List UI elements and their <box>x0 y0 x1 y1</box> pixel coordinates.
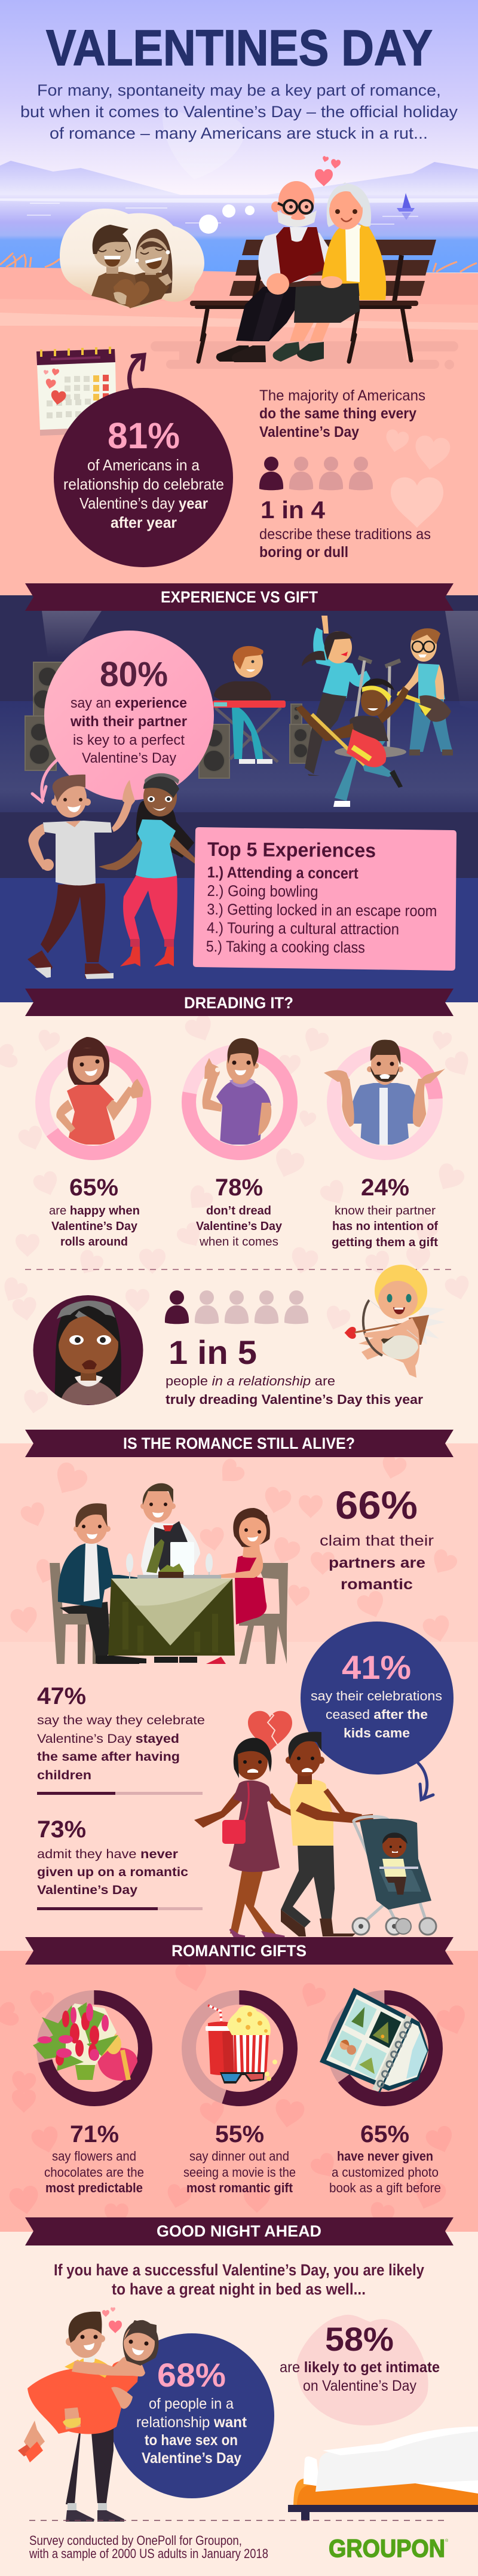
section background: romantic gifts <box>0 1951 478 2232</box>
stat: 71%: 71% <box>70 2121 119 2147</box>
illustration: dinner table <box>50 1483 288 1664</box>
panel: 80% stat circle: is key to a perfect <box>73 732 185 748</box>
panel: 41% stat circle: kids came <box>344 1726 410 1740</box>
illustration: worried woman <box>33 1295 143 1405</box>
section background: dreading it <box>0 1002 478 1443</box>
stat: 55%: most romantic gift <box>186 2180 293 2195</box>
stat: 24%: 24% <box>361 1174 409 1201</box>
section background: romance <box>0 1443 478 1953</box>
stat: 78%: don’t dread <box>206 1204 271 1217</box>
stat: 55%: 55% <box>215 2121 264 2147</box>
banner: is the romance still alive <box>25 1430 454 1457</box>
icon: hearts above couple <box>315 155 341 186</box>
text block: same thing every Valentine's Day: Valentine’s Day <box>259 424 359 440</box>
stat: 66% partners are romantic: 66% <box>335 1483 418 1527</box>
stat: 58%: on Valentine’s Day <box>303 2378 416 2394</box>
stat: 73% never given up: given up on a romantic <box>37 1865 188 1879</box>
source note: Survey conducted by OnePoll for Groupon, <box>29 2533 242 2548</box>
thought bubble with couple <box>60 204 255 308</box>
stat: 73% never given up: 73% <box>37 1816 86 1843</box>
stat: 1 in 4: boring or dull <box>259 544 348 561</box>
arrow: 80% circle to couple <box>32 760 57 801</box>
stat: 47% stayed the same <box>37 1683 205 1795</box>
panel: top 5 experiences: 1.) Attending a concert <box>207 863 358 882</box>
donut: 55% dinner and movie <box>189 1997 290 2099</box>
panel: top 5 experiences: 3.) Getting locked in an escape room <box>207 900 437 920</box>
illustration: bed <box>288 2427 478 2520</box>
stat: 78%: when it comes <box>199 1235 278 1249</box>
stat: 1 in 4: 1 in 4 <box>261 496 325 524</box>
donut: 78% don't dread <box>189 1038 290 1153</box>
stat: 65% <box>49 1174 140 1249</box>
stat: 58%: are likely to get intimate <box>280 2359 440 2376</box>
stat: 73% never given up: admit they have never <box>37 1847 178 1861</box>
icon: faint hearts <box>383 429 451 528</box>
banner: romantic gifts <box>25 1937 454 1965</box>
stat: 78%: Valentine’s Day <box>196 1220 283 1233</box>
intro text <box>20 81 458 142</box>
intro text: For many, spontaneity may be a key part of romance, <box>37 81 441 99</box>
panel: 68% stat circle: Valentine’s Day <box>142 2450 241 2467</box>
stat: 78% <box>196 1174 283 1249</box>
stat: 66% partners are romantic <box>320 1483 434 1593</box>
illustration: flowers and chocolates <box>33 2002 137 2081</box>
illustration: photo album <box>320 1988 428 2092</box>
panel: 68% stat circle: to have sex on <box>145 2432 238 2449</box>
panel: top 5 experiences: 4.) Touring a cultural attraction <box>207 919 399 938</box>
text block: same thing every Valentine's Day <box>259 387 425 440</box>
stat: 65% photo book <box>329 2121 441 2195</box>
stat: 47% stayed the same: Valentine’s Day stayed <box>37 1732 179 1746</box>
panel: 80% stat circle: with their partner <box>70 714 187 730</box>
icon: 1 in 4 people <box>259 457 373 490</box>
icon: beach plants <box>0 253 477 272</box>
panel: 80% stat circle: Valentine’s Day <box>82 750 176 766</box>
panel: 41% stat circle: say their celebrations <box>311 1688 442 1703</box>
stat: 65% photo book: have never given <box>337 2149 433 2164</box>
arrow: 41% circle to stroller <box>418 1763 433 1800</box>
panel: 68% stat circle: of people in a <box>149 2396 234 2412</box>
text block: same thing every Valentine's Day: do the same thing every <box>259 405 416 422</box>
stat: 58% <box>280 2320 440 2394</box>
stat: 73% never given up: Valentine’s Day <box>37 1883 137 1897</box>
panel: 80% stat circle: say an experience <box>71 695 187 711</box>
stat: 24%: getting them a gift <box>332 1236 438 1249</box>
icon: 1 in 5 people <box>165 1290 308 1324</box>
stat: 71%: most predictable <box>45 2180 143 2195</box>
panel: 81% stat circle <box>54 388 233 567</box>
donut: 71% flowers and chocolates <box>44 1997 145 2099</box>
panel: 41% stat circle: 41% <box>342 1648 411 1686</box>
panel: 81% stat circle: after year <box>111 513 177 531</box>
panel: 41% stat circle <box>301 1622 454 1775</box>
stat: 55% <box>183 2121 296 2195</box>
panel: 68% stat circle: 68% <box>157 2356 226 2394</box>
stat: 55%: seeing a movie is the <box>183 2165 296 2180</box>
shadow under bench <box>151 341 458 369</box>
panel: 41% stat circle: ceased after the <box>326 1707 428 1722</box>
source note <box>29 2533 268 2561</box>
panel: top 5 experiences: 2.) Going bowling <box>207 882 318 900</box>
banner: experience vs gift <box>25 583 454 611</box>
panel: top 5 experiences: 5.) Taking a cooking class <box>206 937 365 956</box>
stat: 78%: 78% <box>215 1174 263 1201</box>
illustration: family with stroller <box>194 1731 436 1938</box>
icon: sailboat <box>397 193 415 220</box>
stat: 65%: 65% <box>69 1174 118 1201</box>
stat: 66% partners are romantic: partners are <box>329 1555 425 1571</box>
stat: 65%: Valentine’s Day <box>51 1220 138 1233</box>
title: VALENTINES DAY <box>46 20 433 76</box>
panel: 81% stat circle: of Americans in a <box>87 456 200 474</box>
stat: 24%: know their partner <box>335 1204 436 1217</box>
stat: 66% partners are romantic: romantic <box>341 1576 413 1593</box>
banner: dreading it: DREADING IT? <box>184 994 293 1012</box>
stat: 65% photo book: book as a gift before <box>329 2180 441 2195</box>
intro text: of romance – many Americans are stuck in a rut... <box>50 124 428 142</box>
panel: 68% stat circle: relationship want <box>136 2414 247 2431</box>
good night intro text: If you have a successful Valentine’s Day, you are likely <box>54 2261 424 2279</box>
stat: 71% <box>44 2121 144 2195</box>
arrow: 81% circle to calendar/bench <box>130 355 144 390</box>
stat: 58%: 58% <box>325 2320 394 2358</box>
stat: 24%: has no intention of <box>332 1220 438 1233</box>
stat: 55%: say dinner out and <box>189 2149 289 2164</box>
banner: is the romance still alive: IS THE ROMANCE STILL ALIVE? <box>123 1434 355 1452</box>
donut: 65% happy <box>42 1037 144 1153</box>
stat: 1 in 5: people in a relationship are <box>166 1373 335 1388</box>
stat: 1 in 4 <box>259 496 431 561</box>
stat: 66% partners are romantic: claim that their <box>320 1532 434 1549</box>
illustration: popcorn and soda <box>206 2005 277 2084</box>
stat: 65% photo book: 65% <box>360 2121 409 2147</box>
stat: 65% photo book: a customized photo <box>332 2165 439 2180</box>
panel: 81% stat circle: 81% <box>108 415 180 456</box>
stat: 65%: are happy when <box>49 1204 140 1217</box>
illustration: bench <box>190 240 436 362</box>
good night intro text: to have a great night in bed as well... <box>112 2280 366 2298</box>
stat: 47% stayed the same: the same after having <box>37 1750 180 1764</box>
bench legs and shoes over shadow <box>198 335 411 362</box>
donut: 24% no gift <box>324 1040 445 1153</box>
stat: 24% <box>332 1174 438 1249</box>
stat: 1 in 5: 1 in 5 <box>168 1333 257 1371</box>
stat: 47% stayed the same: children <box>37 1769 91 1782</box>
icon: calendar <box>36 347 117 436</box>
donut: 65% photo book <box>334 1997 436 2099</box>
banner: romantic gifts: ROMANTIC GIFTS <box>171 1942 307 1960</box>
illustration: man carrying woman <box>18 2307 158 2522</box>
banner: dreading it <box>25 989 454 1016</box>
intro text: but when it comes to Valentine’s Day – the official holiday <box>20 103 458 121</box>
illustration: dancing couple <box>27 773 195 979</box>
panel: top 5 experiences <box>193 827 456 971</box>
good night intro text <box>54 2261 424 2298</box>
panel: 68% stat circle <box>109 2333 274 2498</box>
stat: 1 in 5: truly dreading Valentine’s Day this year <box>166 1392 423 1407</box>
stat: 47% stayed the same: say the way they celebrate <box>37 1714 205 1727</box>
stat: 1 in 4: describe these traditions as <box>259 526 431 543</box>
illustration: band <box>213 616 453 807</box>
illustration: elderly couple <box>236 181 386 348</box>
panel: 80% stat circle <box>44 631 214 800</box>
section background: experience stage <box>0 595 478 1002</box>
section background: hero sky, sea and sand <box>0 0 478 595</box>
panel: 81% stat circle: relationship do celebrate <box>63 475 224 493</box>
logo: Groupon: GROUPON <box>329 2534 445 2562</box>
source note: with a sample of 2000 US adults in January 2018 <box>29 2546 268 2561</box>
section background: good night <box>0 2232 478 2576</box>
stat: 71%: say flowers and <box>52 2149 136 2164</box>
panel: 81% stat circle: Valentine’s day year <box>79 494 208 512</box>
banner: good night ahead <box>25 2217 454 2245</box>
panel: top 5 experiences: Top 5 Experiences <box>207 838 376 861</box>
illustration: kiss mark <box>296 2315 428 2425</box>
banner: experience vs gift: EXPERIENCE VS GIFT <box>161 588 318 606</box>
stat: 73% never given up <box>37 1816 203 1910</box>
stat: 65%: rolls around <box>60 1235 128 1249</box>
text block: same thing every Valentine's Day: The majority of Americans <box>259 387 425 404</box>
illustration: speakers <box>25 662 311 778</box>
stat: 71%: chocolates are the <box>44 2165 144 2180</box>
icon: broken heart <box>248 1708 292 1751</box>
logo: Groupon: ® <box>445 2538 449 2543</box>
banner: good night ahead: GOOD NIGHT AHEAD <box>157 2222 321 2240</box>
panel: 80% stat circle: 80% <box>100 655 168 694</box>
stat: 47% stayed the same: 47% <box>37 1683 86 1709</box>
stat: 1 in 5 <box>166 1333 423 1407</box>
illustration: cupid <box>344 1265 445 1378</box>
